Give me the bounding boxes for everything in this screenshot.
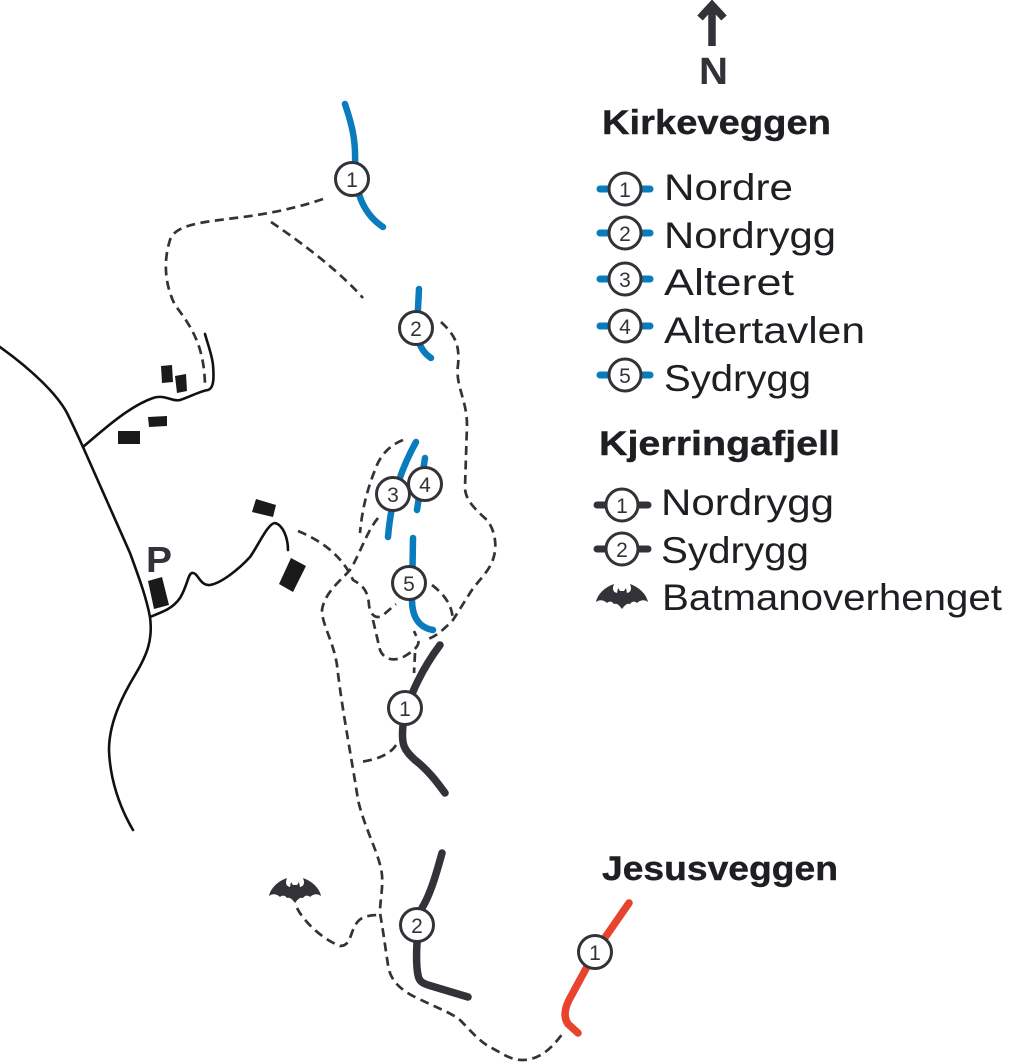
north arrow: N xyxy=(699,51,728,93)
route: Kirkeveggen 3 Alteret: 3 xyxy=(387,484,399,507)
legend item: Sydrygg: Sydrygg xyxy=(664,358,811,399)
legend item: Alteret: Alteret xyxy=(664,262,795,303)
route: Kirkeveggen 5 Sydrygg: 5 xyxy=(403,573,415,596)
roads xyxy=(0,334,288,830)
legend item: Nordrygg xyxy=(597,482,834,523)
route: Kirkeveggen 5 Sydrygg xyxy=(392,538,433,630)
route: Kjerringafjell 1 Nordrygg: 1 xyxy=(399,698,411,721)
route: Kjerringafjell 1 Nordrygg xyxy=(388,645,445,793)
legend item: Sydrygg: 2 xyxy=(616,539,628,562)
legend item: Alteret xyxy=(600,262,795,303)
icon: bat on map xyxy=(269,878,321,903)
legend item: Altertavlen: 4 xyxy=(619,316,631,339)
route: Kirkeveggen 4 Altertavlen: 4 xyxy=(419,474,431,497)
parking label: P xyxy=(146,539,172,580)
legend item: Nordrygg: 2 xyxy=(619,223,631,246)
route: Kirkeveggen 4 Altertavlen xyxy=(408,458,442,510)
route: Jesusveggen 1: 1 xyxy=(589,942,601,965)
legend: Kjerringafjell xyxy=(596,482,1003,618)
route: Kjerringafjell 2 Sydrygg: 2 xyxy=(411,915,423,938)
route: Kjerringafjell 2 Sydrygg xyxy=(400,853,468,997)
legend item: Alteret: 3 xyxy=(619,269,631,292)
legend item: Sydrygg: Sydrygg xyxy=(661,530,809,571)
route: Kirkeveggen 2 Nordrygg xyxy=(400,289,432,358)
legend item: Nordrygg: 1 xyxy=(616,495,628,518)
route: Kirkeveggen 1 Nordre xyxy=(336,104,383,227)
legend: Kirkeveggen xyxy=(600,167,865,399)
legend item: Altertavlen: Altertavlen xyxy=(664,310,865,351)
legend item: Batmanoverhenget: Batmanoverhenget xyxy=(662,577,1003,618)
heading: Kirkeveggen: Kirkeveggen xyxy=(602,104,831,142)
legend item: Nordrygg: Nordrygg xyxy=(664,215,836,256)
buildings xyxy=(118,365,306,609)
north arrow xyxy=(699,5,728,93)
route: Kirkeveggen 1 Nordre: 1 xyxy=(346,169,358,192)
heading: Kjerringafjell: Kjerringafjell xyxy=(599,425,840,463)
route: Kirkeveggen 3 Alteret xyxy=(376,442,416,537)
legend item: Sydrygg: 5 xyxy=(619,365,631,388)
legend item: Sydrygg xyxy=(600,358,811,399)
heading: Jesusveggen: Jesusveggen xyxy=(602,850,838,888)
legend item: Nordre: Nordre xyxy=(664,167,793,208)
legend item: Sydrygg xyxy=(597,530,809,571)
legend item: Nordre: 1 xyxy=(619,179,631,202)
route: Kirkeveggen 2 Nordrygg: 2 xyxy=(410,318,422,341)
legend item: Nordre xyxy=(600,167,793,208)
legend item: Altertavlen xyxy=(600,310,865,351)
legend item: Nordrygg xyxy=(600,215,836,256)
route: Jesusveggen 1 xyxy=(565,903,629,1033)
trails xyxy=(166,199,563,1060)
legend item: Nordrygg: Nordrygg xyxy=(661,482,834,523)
